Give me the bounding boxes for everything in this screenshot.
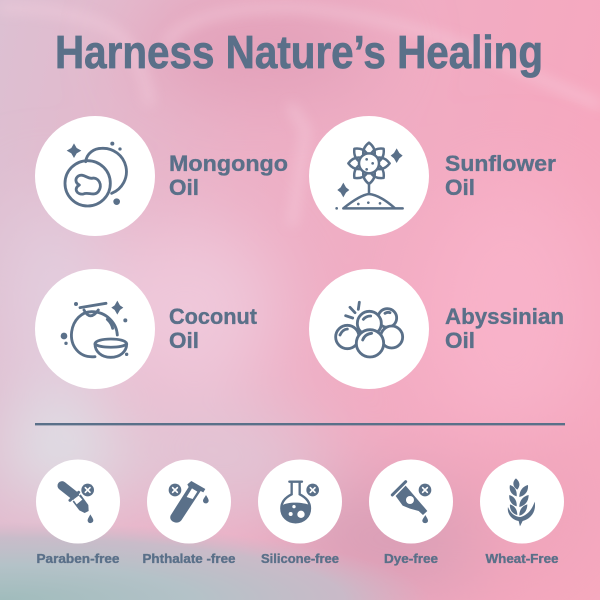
- badge: Phthalate-free: [142, 460, 236, 566]
- label: Wheat-Free: [486, 552, 559, 566]
- label: Coconut Oil: Coconut: [169, 304, 257, 329]
- badge: Silicone-free: [258, 460, 342, 566]
- label: Dye-free: [384, 552, 438, 566]
- badge: Dye-free: [369, 460, 453, 566]
- label: Mongongo Oil: Oil: [169, 175, 199, 200]
- panel: Mongongo oil: [35, 116, 288, 236]
- label: Abyssinian Oil: Abyssinian: [445, 304, 564, 329]
- icon: wheat: [508, 478, 535, 526]
- badge: Wheat-free: [480, 460, 564, 566]
- label: Mongongo Oil: Mongongo: [169, 151, 288, 176]
- label: Coconut Oil: Oil: [169, 328, 199, 353]
- icon: coconut: [61, 301, 128, 357]
- label: Silicone-free: [261, 552, 339, 566]
- icon: dropper: [62, 484, 94, 523]
- icon: paint tube: [392, 482, 431, 523]
- icon: sunflower: [335, 143, 403, 210]
- label: Sunflower Oil: Oil: [445, 175, 475, 200]
- label: Paraben-free: [36, 552, 120, 566]
- title: Harness Nature’s Healing: [55, 26, 543, 78]
- badge: Paraben-free: [36, 460, 120, 566]
- panel: Abyssinian oil: [309, 269, 564, 389]
- icon: mongongo nut: [65, 142, 126, 206]
- panel: Sunflower oil: [309, 116, 556, 236]
- panel: Coconut oil: [35, 269, 257, 389]
- label: Abyssinian Oil: Oil: [445, 328, 475, 353]
- label: Phthalate -free: [142, 552, 236, 566]
- icon: abyssinian seeds: [336, 302, 403, 357]
- icon: flask: [281, 482, 319, 522]
- label: Sunflower Oil: Sunflower: [445, 151, 556, 176]
- divider: [35, 423, 565, 425]
- icon: test tube: [169, 481, 209, 523]
